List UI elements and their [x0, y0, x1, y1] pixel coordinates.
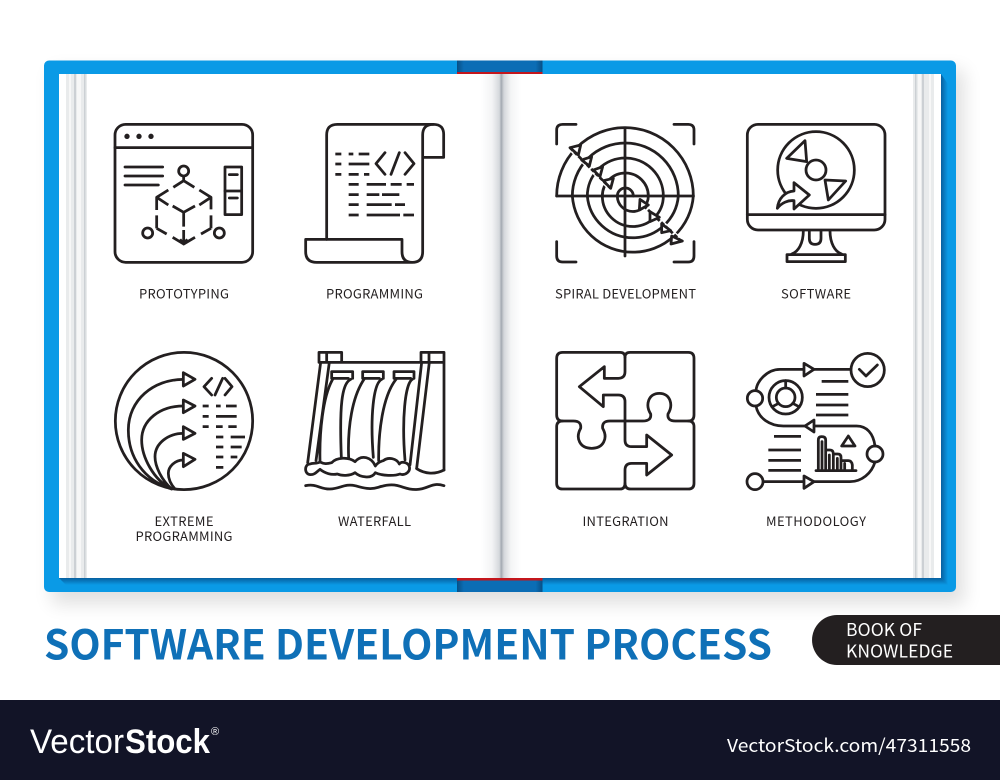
right page	[501, 74, 941, 578]
label: methodology: METHODOLOGY	[766, 511, 866, 530]
label: extreme programming: EXTREME	[154, 511, 214, 530]
icon: integration	[557, 352, 694, 489]
spine bottom	[457, 578, 542, 592]
icon: programming	[306, 124, 444, 262]
footer bar	[0, 700, 1000, 780]
footer image id: VectorStock.com/47311558	[727, 732, 971, 758]
footer logo: Vector	[30, 723, 124, 761]
icon: prototyping	[115, 124, 253, 262]
book drop shadow	[52, 70, 964, 604]
label: extreme programming	[136, 511, 232, 545]
label: software: SOFTWARE	[781, 284, 851, 302]
cover inner shadow	[59, 74, 948, 585]
icon: software	[747, 124, 885, 262]
book cover	[44, 60, 956, 592]
footer logo: Stock	[125, 723, 210, 761]
label: spiral development: SPIRAL DEVELOPMENT	[555, 284, 696, 302]
label: extreme programming: PROGRAMMING	[136, 526, 232, 545]
label: integration: INTEGRATION	[582, 511, 668, 530]
icon: extreme programming	[115, 352, 253, 490]
badge: book of knowledge: BOOK OF	[846, 617, 922, 642]
icon: spiral development	[557, 124, 694, 262]
icon: methodology	[747, 353, 884, 490]
label: waterfall: WATERFALL	[338, 511, 411, 530]
label: programming: PROGRAMMING	[326, 284, 423, 302]
registered mark: ®	[211, 726, 219, 738]
icon: waterfall	[306, 352, 444, 490]
left page	[59, 74, 501, 578]
title: SOFTWARE DEVELOPMENT PROCESS	[44, 612, 772, 672]
spine top	[457, 60, 542, 74]
badge: book of knowledge	[812, 615, 1000, 665]
open book	[44, 60, 964, 604]
badge: book of knowledge: KNOWLEDGE	[846, 638, 953, 664]
label: prototyping: PROTOTYPING	[139, 284, 229, 302]
footer logo	[30, 723, 210, 761]
